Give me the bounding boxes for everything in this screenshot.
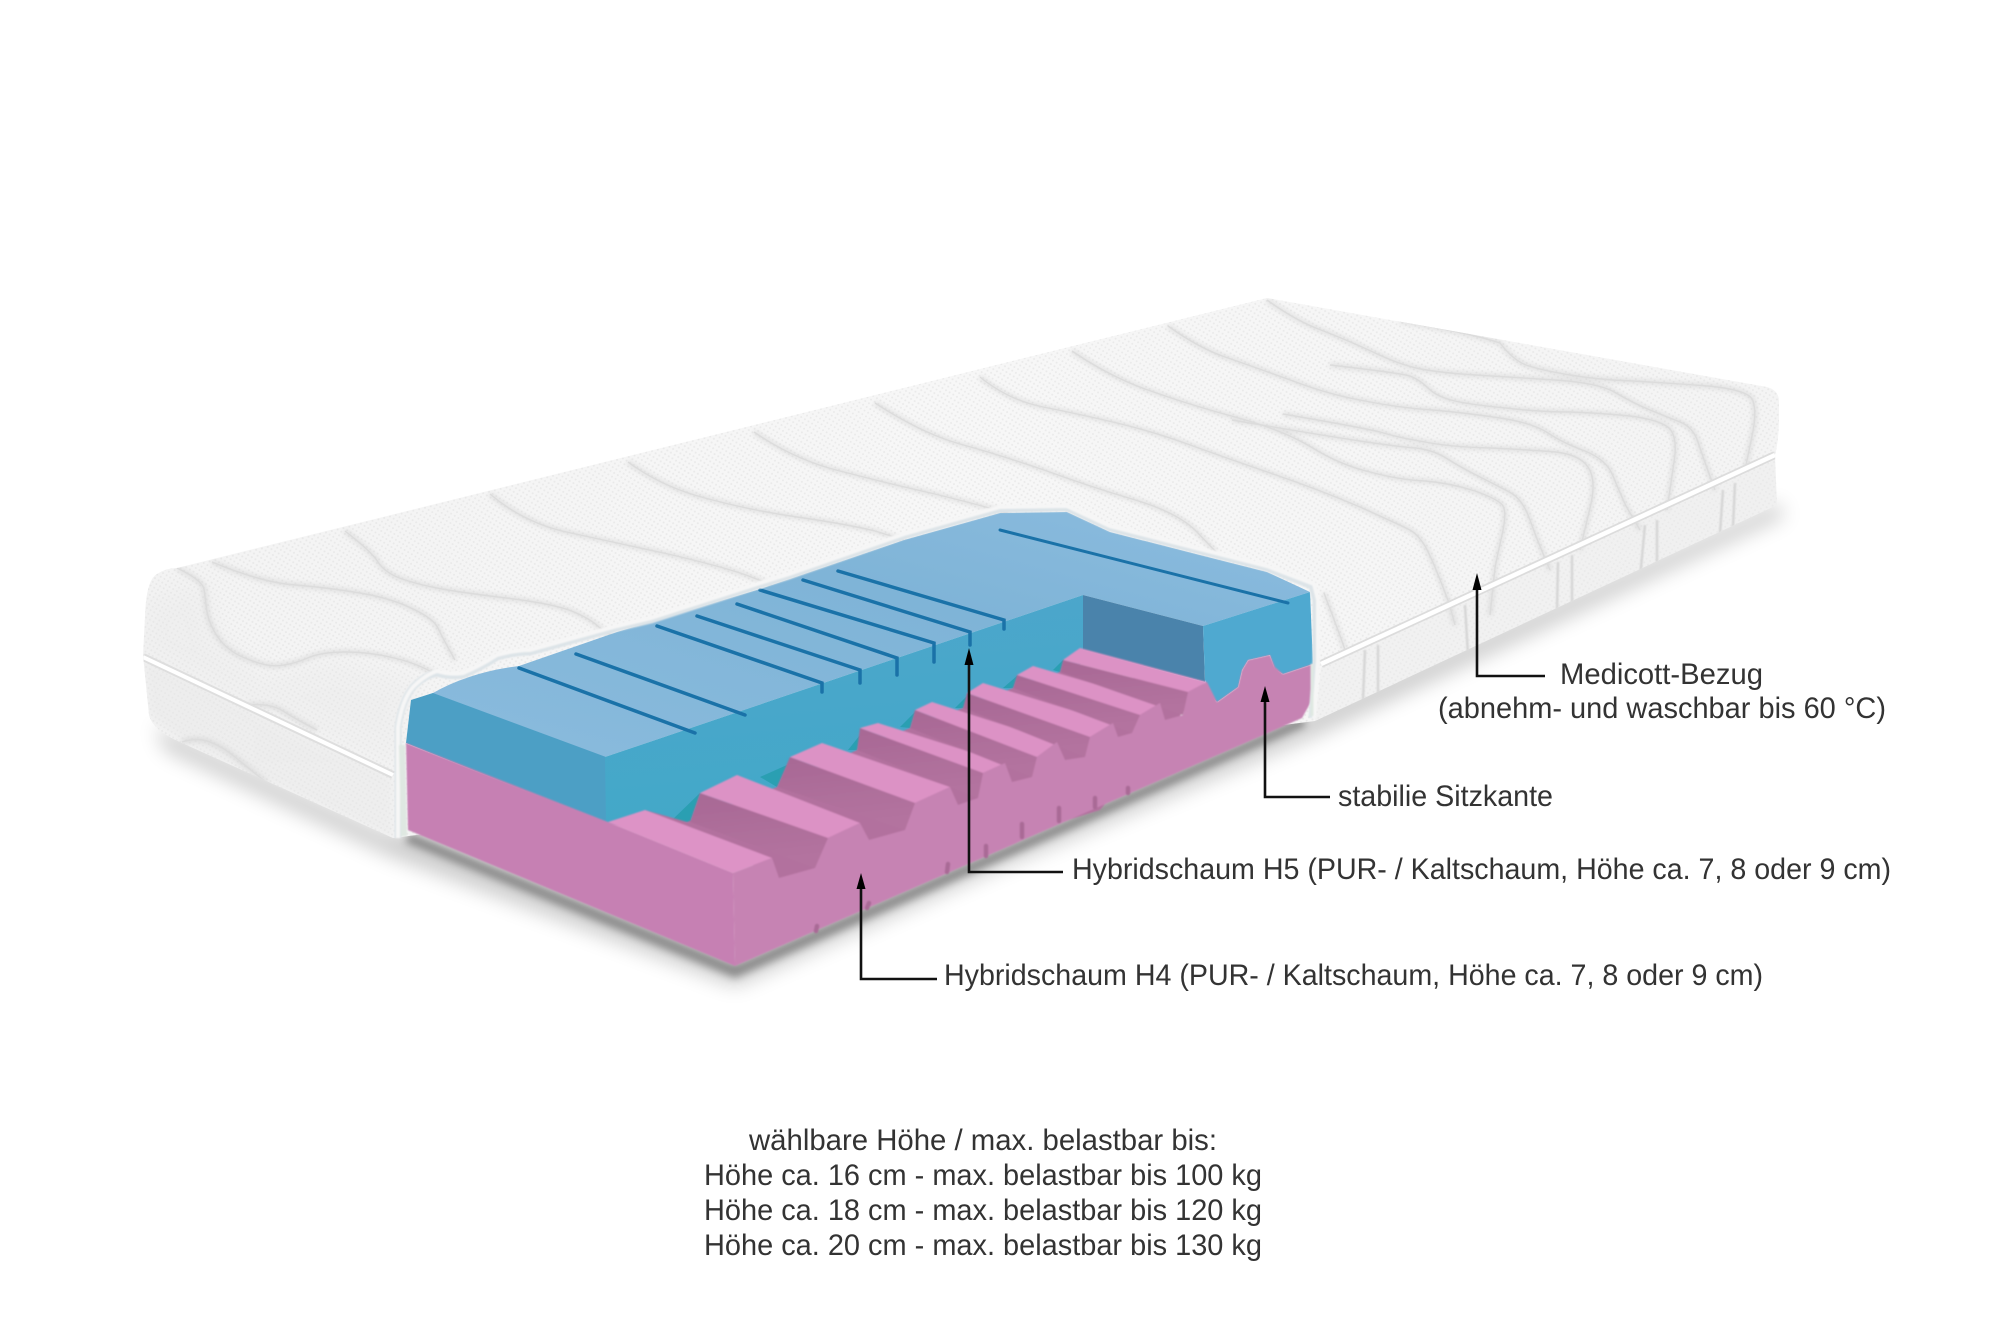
pink front face xyxy=(733,655,1313,966)
mattress ground shadow xyxy=(155,503,1785,986)
callout: stabilie Sitzkante: stabilie Sitzkante xyxy=(1338,780,1553,813)
cover edge fluff xyxy=(398,506,1318,838)
ridge 1 xyxy=(608,810,772,873)
blue top face xyxy=(413,512,1310,757)
groove floor xyxy=(645,672,1207,905)
layer: Hybridschaum H4 (pink) xyxy=(406,648,1313,966)
ridge 6 xyxy=(963,683,1113,757)
ridge 7 xyxy=(1013,666,1160,733)
text block: height and load table: wählbare Höhe / max. belastbar bis: xyxy=(748,1124,1217,1157)
text block: height and load table xyxy=(704,1124,1262,1262)
fold bands xyxy=(1363,483,1735,700)
bottom notches xyxy=(816,788,1128,931)
callout: Medicott-Bezug xyxy=(1438,573,1886,725)
blue side face xyxy=(406,693,610,825)
quilting lines (crisp) xyxy=(177,300,1755,783)
zippers xyxy=(143,455,1775,775)
callout: Medicott-Bezug: Medicott-Bezug xyxy=(1560,658,1763,691)
slots xyxy=(519,530,1288,733)
ridge 5 xyxy=(910,702,1057,777)
text block: height and load table: Höhe ca. 20 cm - max. belastbar bis 130 kg xyxy=(704,1229,1262,1262)
ridge 3 xyxy=(777,743,950,830)
blue notch face xyxy=(1083,595,1205,682)
pink side face xyxy=(406,743,735,966)
callout: stabilie Sitzkante xyxy=(1260,686,1553,813)
mattress cover: Medicott-Bezug xyxy=(143,298,1779,838)
foam core xyxy=(398,506,1318,966)
callout: Hybridschaum H5: Hybridschaum H5 (PUR- / Kaltschaum, Höhe ca. 7, 8 oder 9 cm) xyxy=(1072,853,1891,886)
callout: Hybridschaum H5 xyxy=(964,648,1891,886)
callout: Medicott-Bezug: (abnehm- und waschbar bis 60 °C) xyxy=(1438,692,1886,725)
teal shade xyxy=(670,659,1064,822)
callout: Hybridschaum H4: Hybridschaum H4 (PUR- / Kaltschaum, Höhe ca. 7, 8 oder 9 cm) xyxy=(944,959,1763,992)
text block: height and load table: Höhe ca. 18 cm - max. belastbar bis 120 kg xyxy=(704,1194,1262,1227)
text block: height and load table: Höhe ca. 16 cm - max. belastbar bis 100 kg xyxy=(704,1159,1262,1192)
quilting lines (soft shadow) xyxy=(177,300,1755,783)
callout: Hybridschaum H4 xyxy=(856,873,1763,992)
blue seat edge face xyxy=(1203,592,1313,702)
ridge 2 xyxy=(690,775,860,868)
ridge 4 xyxy=(857,723,1005,798)
blue front face xyxy=(605,595,1083,835)
layer: Hybridschaum H5 (blue) xyxy=(406,512,1313,835)
ridge 8 xyxy=(1060,648,1207,715)
